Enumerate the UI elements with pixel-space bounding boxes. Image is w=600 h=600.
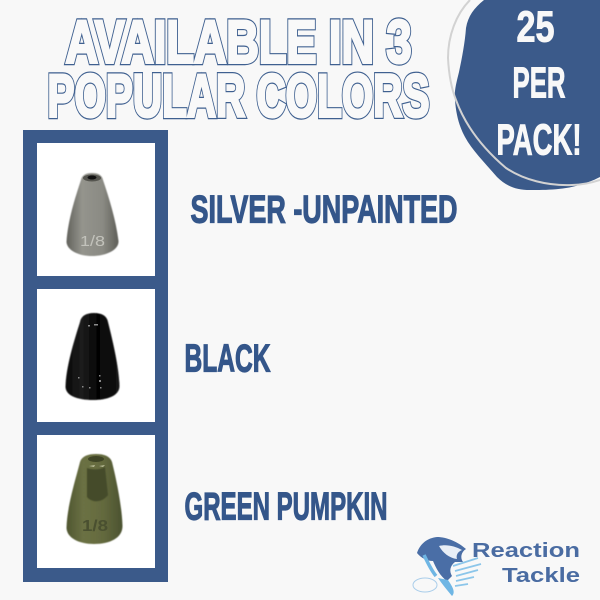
title bbox=[48, 8, 430, 130]
swatch: silver sinker bbox=[37, 143, 155, 276]
label: silver: SILVER -UNPAINTED bbox=[190, 188, 458, 232]
badge: 25 per pack bbox=[448, 0, 600, 190]
badge: 25 per pack: 25 bbox=[516, 2, 554, 52]
swatch: silver sinker: 1/8 bbox=[80, 233, 105, 250]
label: black: BLACK bbox=[184, 338, 270, 380]
icon: leaping fish bbox=[413, 537, 481, 596]
swatch: green pumpkin sinker bbox=[37, 435, 155, 568]
logo: Reaction Tackle bbox=[413, 537, 580, 596]
title: AVAILABLE IN 3 bbox=[66, 8, 412, 76]
logo: Reaction Tackle: Tackle bbox=[502, 565, 580, 587]
title: AVAILABLE IN 3 bbox=[66, 8, 412, 76]
swatch: black sinker bbox=[37, 289, 155, 422]
swatch: green pumpkin sinker: 1/8 bbox=[82, 518, 108, 535]
logo: Reaction Tackle: Reaction bbox=[472, 540, 580, 562]
title: POPULAR COLORS bbox=[48, 62, 430, 130]
label: green pumpkin: GREEN PUMPKIN bbox=[184, 486, 388, 528]
panel: colour swatches bbox=[23, 130, 168, 582]
title: POPULAR COLORS bbox=[48, 62, 430, 130]
